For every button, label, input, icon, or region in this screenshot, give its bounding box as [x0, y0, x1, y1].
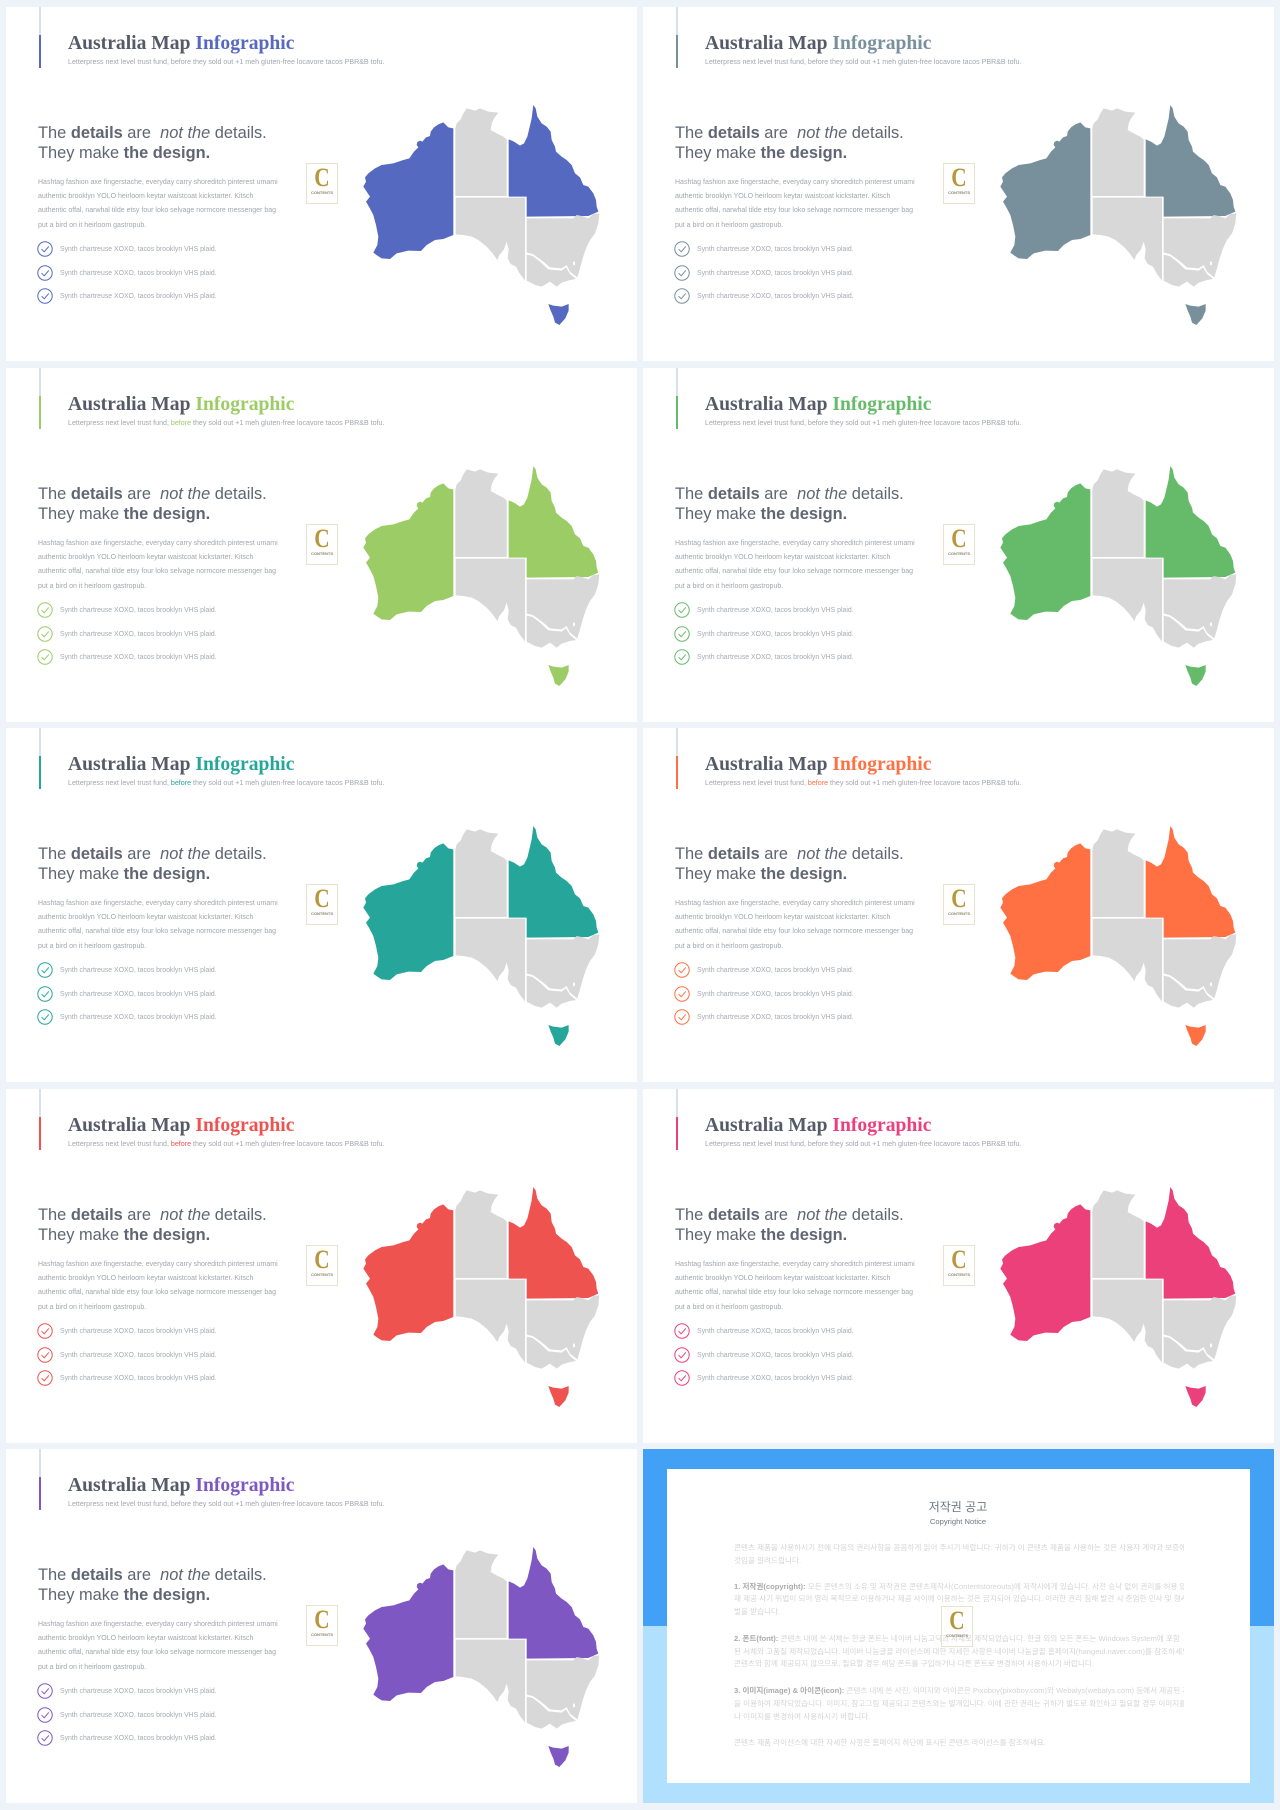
accent line — [39, 1449, 40, 1510]
logo — [306, 163, 338, 204]
accent line — [39, 7, 40, 68]
body text: put a bird on it heirloom gastropub. — [38, 222, 146, 229]
white notice sheet — [667, 1469, 1250, 1783]
check item 1 — [674, 602, 854, 618]
map of Australia — [363, 826, 600, 1046]
check item 3 — [674, 1370, 864, 1386]
body text — [38, 178, 278, 229]
logo: C — [951, 884, 967, 913]
subtitle: Letterpress next level trust fund, before they sold out +1 meh gluten-free locavore tacos PBR&B tofu. — [705, 779, 1021, 787]
body text: put a bird on it heirloom gastropub. — [675, 943, 783, 950]
logo: CONTENTS — [311, 1632, 333, 1637]
body text — [675, 897, 915, 954]
body text: authentic brooklyn YOLO heirloom keytar waistcoat kickstarter. Kitsch — [38, 554, 253, 561]
body text: put a bird on it heirloom gastropub. — [675, 222, 783, 229]
map of Australia — [363, 466, 600, 686]
body text: authentic offal, narwhal tilde etsy four loko selvage normcore messenger bag — [38, 1649, 276, 1656]
body text: authentic brooklyn YOLO heirloom keytar waistcoat kickstarter. Kitsch — [675, 554, 890, 561]
check item 1 — [37, 241, 217, 257]
check item 1 — [37, 1323, 227, 1339]
logo: CONTENTS — [946, 1633, 968, 1638]
check item 2 — [37, 1347, 227, 1363]
panel: light green — [6, 368, 637, 722]
logo — [941, 1606, 973, 1647]
body text: Hashtag fashion axe fingerstache, everyday carry shoreditch pinterest umami — [38, 1621, 278, 1628]
notice title: 저작권 공고 — [929, 1500, 987, 1514]
check item 2: Synth chartreuse XOXO, tacos brooklyn VHS plaid. — [697, 630, 854, 638]
body text: authentic offal, narwhal tilde etsy four loko selvage normcore messenger bag — [675, 928, 913, 935]
check item 1: Synth chartreuse XOXO, tacos brooklyn VHS plaid. — [697, 606, 854, 614]
check item 1: Synth chartreuse XOXO, tacos brooklyn VHS plaid. — [697, 246, 854, 252]
subtitle: Letterpress next level trust fund, before they sold out +1 meh gluten-free locavore tacos PBR&B tofu. — [68, 1140, 384, 1148]
body text: authentic brooklyn YOLO heirloom keytar waistcoat kickstarter. Kitsch — [38, 914, 253, 921]
logo — [943, 884, 975, 925]
heading: The details are not the details. — [38, 1566, 267, 1584]
subtitle: Letterpress next level trust fund, before they sold out +1 meh gluten-free locavore tacos PBR&B tofu. — [705, 419, 1021, 427]
body text: put a bird on it heirloom gastropub. — [675, 1304, 783, 1311]
body text: Hashtag fashion axe fingerstache, everyday carry shoreditch pinterest umami — [675, 900, 915, 907]
logo — [306, 884, 338, 925]
check item 1: Synth chartreuse XOXO, tacos brooklyn VHS plaid. — [60, 606, 217, 614]
body text — [675, 540, 915, 590]
body text: authentic offal, narwhal tilde etsy four loko selvage normcore messenger bag — [38, 207, 276, 214]
heading: They make the design. — [38, 865, 210, 883]
notice text line: 것임을 알려드립니다. — [734, 1556, 801, 1565]
heading: They make the design. — [675, 505, 847, 523]
check item 1 — [37, 1683, 227, 1699]
check item 3 — [37, 288, 217, 304]
check item 2: Synth chartreuse XOXO, tacos brooklyn VHS plaid. — [60, 1712, 217, 1718]
check item 1: Synth chartreuse XOXO, tacos brooklyn VHS plaid. — [697, 1328, 854, 1334]
accent line — [676, 1089, 678, 1150]
check item 1: Synth chartreuse XOXO, tacos brooklyn VHS plaid. — [60, 1328, 217, 1334]
body text — [38, 1618, 278, 1675]
logo: C — [949, 1606, 965, 1635]
heading — [38, 124, 267, 162]
body text: authentic offal, narwhal tilde etsy four loko selvage normcore messenger bag — [675, 568, 913, 575]
map of Australia — [977, 1172, 1257, 1422]
panel: purple — [6, 1449, 637, 1803]
map of Australia — [363, 105, 600, 325]
accent line — [39, 728, 40, 789]
body text: put a bird on it heirloom gastropub. — [38, 583, 146, 590]
heading — [38, 845, 267, 883]
body text: put a bird on it heirloom gastropub. — [38, 1304, 146, 1311]
body text: authentic offal, narwhal tilde etsy four loko selvage normcore messenger bag — [38, 928, 276, 935]
check item 2 — [674, 1347, 864, 1363]
body text: authentic brooklyn YOLO heirloom keytar waistcoat kickstarter. Kitsch — [38, 193, 253, 200]
check item 2: Synth chartreuse XOXO, tacos brooklyn VHS plaid. — [697, 1352, 854, 1358]
logo: CONTENTS — [311, 1272, 333, 1277]
check item 3 — [37, 649, 217, 665]
accent line — [39, 368, 40, 429]
logo: C — [314, 884, 330, 913]
check item 3 — [37, 1009, 217, 1025]
subtitle: Letterpress next level trust fund, before they sold out +1 meh gluten-free locavore tacos PBR&B tofu. — [68, 1500, 384, 1508]
logo: C — [951, 524, 967, 553]
logo: CONTENTS — [948, 1272, 970, 1277]
check item 3 — [674, 1009, 864, 1025]
logo: CONTENTS — [948, 911, 970, 916]
check item 1 — [37, 962, 217, 978]
check item 2 — [674, 265, 854, 281]
logo: C — [951, 163, 967, 192]
check item 3: Synth chartreuse XOXO, tacos brooklyn VHS plaid. — [697, 1014, 854, 1020]
check item 1: Synth chartreuse XOXO, tacos brooklyn VHS plaid. — [697, 966, 854, 974]
heading: They make the design. — [675, 865, 847, 883]
check item 2: Synth chartreuse XOXO, tacos brooklyn VHS plaid. — [60, 990, 217, 998]
title: Australia Map Infographic — [705, 754, 931, 775]
check item 3: Synth chartreuse XOXO, tacos brooklyn VHS plaid. — [697, 1374, 854, 1382]
logo — [943, 524, 975, 565]
logo: C — [951, 1245, 967, 1274]
body text: Hashtag fashion axe fingerstache, everyday carry shoreditch pinterest umami — [38, 540, 278, 547]
body text: authentic brooklyn YOLO heirloom keytar waistcoat kickstarter. Kitsch — [38, 1275, 253, 1282]
subtitle: Letterpress next level trust fund, before they sold out +1 meh gluten-free locavore tacos PBR&B tofu. — [705, 58, 1021, 66]
check item 2 — [674, 986, 864, 1002]
check item 1 — [674, 1323, 864, 1339]
title: Australia Map Infographic — [705, 33, 931, 54]
panel: teal — [6, 728, 637, 1082]
panel: slate — [643, 7, 1274, 361]
check item 3 — [674, 288, 854, 304]
heading — [675, 485, 904, 523]
heading: The details are not the details. — [38, 485, 267, 503]
notice text line: 벌을 받습니다. — [734, 1607, 780, 1616]
logo — [306, 524, 338, 565]
heading: The details are not the details. — [38, 124, 267, 142]
heading: The details are not the details. — [38, 1206, 267, 1224]
check item 2 — [37, 265, 217, 281]
heading: They make the design. — [38, 1586, 210, 1604]
map of Australia — [340, 1532, 620, 1782]
check item 3: Synth chartreuse XOXO, tacos brooklyn VHS plaid. — [60, 1014, 217, 1020]
body text — [38, 900, 278, 950]
body text: authentic offal, narwhal tilde etsy four loko selvage normcore messenger bag — [675, 207, 913, 214]
title: Australia Map Infographic — [68, 754, 294, 775]
check item 2 — [37, 986, 217, 1002]
accent line — [676, 368, 678, 429]
body text — [675, 1258, 915, 1315]
panel: orange — [643, 728, 1274, 1082]
body text: Hashtag fashion axe fingerstache, everyday carry shoreditch pinterest umami — [675, 1261, 915, 1268]
subtitle: Letterpress next level trust fund, before they sold out +1 meh gluten-free locavore tacos PBR&B tofu. — [68, 779, 384, 787]
body text: put a bird on it heirloom gastropub. — [675, 583, 783, 590]
check item 3: Synth chartreuse XOXO, tacos brooklyn VHS plaid. — [60, 654, 217, 660]
check item 3 — [37, 1730, 227, 1746]
check item 1 — [674, 241, 854, 257]
body text: authentic brooklyn YOLO heirloom keytar waistcoat kickstarter. Kitsch — [675, 1275, 890, 1282]
heading: They make the design. — [675, 144, 847, 162]
check item 2: Synth chartreuse XOXO, tacos brooklyn VHS plaid. — [60, 270, 217, 276]
check item 3: Synth chartreuse XOXO, tacos brooklyn VHS plaid. — [60, 292, 217, 300]
body text: authentic brooklyn YOLO heirloom keytar waistcoat kickstarter. Kitsch — [38, 1635, 253, 1642]
map of Australia — [1000, 105, 1236, 325]
title: Australia Map Infographic — [705, 394, 931, 415]
body text: Hashtag fashion axe fingerstache, everyday carry shoreditch pinterest umami — [38, 1261, 278, 1268]
logo: C — [314, 524, 330, 553]
logo: CONTENTS — [311, 911, 333, 916]
logo: CONTENTS — [948, 190, 970, 195]
body text: authentic offal, narwhal tilde etsy four loko selvage normcore messenger bag — [38, 1289, 276, 1296]
map of Australia — [1000, 466, 1236, 686]
check item 2: Synth chartreuse XOXO, tacos brooklyn VHS plaid. — [697, 990, 854, 998]
title: Australia Map Infographic — [68, 33, 294, 54]
panel: red — [6, 1089, 637, 1443]
check item 3 — [37, 1370, 227, 1386]
heading: They make the design. — [38, 1226, 210, 1244]
notice subtitle: Copyright Notice — [930, 1517, 986, 1526]
accent line — [676, 728, 678, 789]
heading — [675, 124, 904, 162]
heading: They make the design. — [675, 1226, 847, 1244]
map of Australia — [977, 811, 1257, 1061]
body text — [38, 540, 278, 590]
check item 2: Synth chartreuse XOXO, tacos brooklyn VHS plaid. — [60, 630, 217, 638]
logo — [943, 163, 975, 204]
heading: The details are not the details. — [38, 845, 267, 863]
check item 2 — [37, 1707, 227, 1723]
subtitle: Letterpress next level trust fund, before they sold out +1 meh gluten-free locavore tacos PBR&B tofu. — [68, 419, 384, 427]
title: Australia Map Infographic — [705, 1115, 931, 1136]
body text: authentic brooklyn YOLO heirloom keytar waistcoat kickstarter. Kitsch — [675, 914, 890, 921]
logo — [943, 1245, 975, 1286]
heading: The details are not the details. — [675, 1206, 904, 1224]
check item 1: Synth chartreuse XOXO, tacos brooklyn VHS plaid. — [60, 246, 217, 252]
panel: pink — [643, 1089, 1274, 1443]
panel: green — [643, 368, 1274, 722]
check item 2 — [37, 626, 217, 642]
check item 2: Synth chartreuse XOXO, tacos brooklyn VHS plaid. — [60, 1352, 217, 1358]
heading — [38, 1206, 267, 1245]
heading — [38, 485, 267, 523]
check item 2: Synth chartreuse XOXO, tacos brooklyn VHS plaid. — [697, 270, 854, 276]
notice text line: 1. 저작권(copyright): 모든 콘텐츠의 소유 및 저작권은 콘텐츠제작사(Contentstoreouts)에 저작사에게 있습니다. 사전 승낙 없이 권리를 허용 않는 — [734, 1582, 1184, 1591]
accent line — [676, 7, 678, 68]
logo — [306, 1245, 338, 1286]
subtitle: Letterpress next level trust fund, before they sold out +1 meh gluten-free locavore tacos PBR&B tofu. — [68, 58, 384, 66]
check item 1 — [37, 602, 217, 618]
check item 1: Synth chartreuse XOXO, tacos brooklyn VHS plaid. — [60, 966, 217, 974]
title: Australia Map Infographic — [68, 1475, 294, 1496]
logo: C — [314, 1605, 330, 1634]
check item 3: Synth chartreuse XOXO, tacos brooklyn VHS plaid. — [60, 1374, 217, 1382]
check item 1: Synth chartreuse XOXO, tacos brooklyn VHS plaid. — [60, 1688, 217, 1694]
heading: The details are not the details. — [675, 845, 904, 863]
logo: C — [314, 163, 330, 192]
title: Australia Map Infographic — [68, 1115, 294, 1136]
panel: blue — [6, 7, 637, 361]
notice text line: 나 이미지를 변경하여 사용하시기 바랍니다. — [734, 1712, 870, 1721]
check item 3: Synth chartreuse XOXO, tacos brooklyn VHS plaid. — [60, 1734, 217, 1742]
logo: CONTENTS — [311, 551, 333, 556]
body text: put a bird on it heirloom gastropub. — [38, 943, 146, 950]
body text: authentic brooklyn YOLO heirloom keytar waistcoat kickstarter. Kitsch — [675, 193, 890, 200]
body text: Hashtag fashion axe fingerstache, everyday carry shoreditch pinterest umami — [38, 179, 278, 186]
check item 2 — [674, 626, 854, 642]
body text: authentic offal, narwhal tilde etsy four loko selvage normcore messenger bag — [675, 1289, 913, 1296]
heading: They make the design. — [38, 144, 210, 162]
heading: The details are not the details. — [675, 485, 904, 503]
body text — [38, 1258, 278, 1315]
body text: Hashtag fashion axe fingerstache, everyday carry shoreditch pinterest umami — [675, 540, 915, 547]
heading: They make the design. — [38, 505, 210, 523]
body text: Hashtag fashion axe fingerstache, everyday carry shoreditch pinterest umami — [38, 900, 278, 907]
body text: authentic offal, narwhal tilde etsy four loko selvage normcore messenger bag — [38, 568, 276, 575]
logo — [306, 1605, 338, 1646]
notice text line: 콘텐츠 제품 라이선스에 대한 자세한 사항은 홈페이지 하단에 표시된 콘텐츠 라이선스를 참조하세요. — [734, 1738, 1046, 1747]
heading: The details are not the details. — [675, 124, 904, 142]
check item 1 — [674, 962, 864, 978]
check item 3: Synth chartreuse XOXO, tacos brooklyn VHS plaid. — [697, 292, 854, 300]
panel: copyright notice — [643, 1449, 1274, 1803]
body text: put a bird on it heirloom gastropub. — [38, 1664, 146, 1671]
check item 3: Synth chartreuse XOXO, tacos brooklyn VHS plaid. — [697, 654, 854, 660]
heading — [675, 845, 904, 883]
logo: CONTENTS — [948, 551, 970, 556]
body text: Hashtag fashion axe fingerstache, everyday carry shoreditch pinterest umami — [675, 179, 915, 186]
notice text line: 콘텐츠와 함께 제공되지 않으므로, 필요할 경우 해당 폰트를 구입하거나 다른 폰트로 변경하여 사용하시기 바랍니다. — [734, 1659, 1094, 1668]
heading — [675, 1206, 904, 1245]
notice text line: 2. 폰트(font): 콘텐츠 내에 쓴 서체는 한글 폰트는 네이버 나눔고딕과 서체로 제작되었습니다. 한글 외의 모든 폰트는 Windows System에 포함 — [734, 1634, 1180, 1643]
map of Australia — [340, 1172, 620, 1422]
subtitle: Letterpress next level trust fund, before they sold out +1 meh gluten-free locavore tacos PBR&B tofu. — [705, 1140, 1021, 1148]
body text — [675, 178, 915, 229]
heading — [38, 1566, 267, 1605]
check item 3 — [674, 649, 854, 665]
logo: C — [314, 1245, 330, 1274]
accent line — [39, 1089, 40, 1150]
title: Australia Map Infographic — [68, 394, 294, 415]
logo: CONTENTS — [311, 190, 333, 195]
